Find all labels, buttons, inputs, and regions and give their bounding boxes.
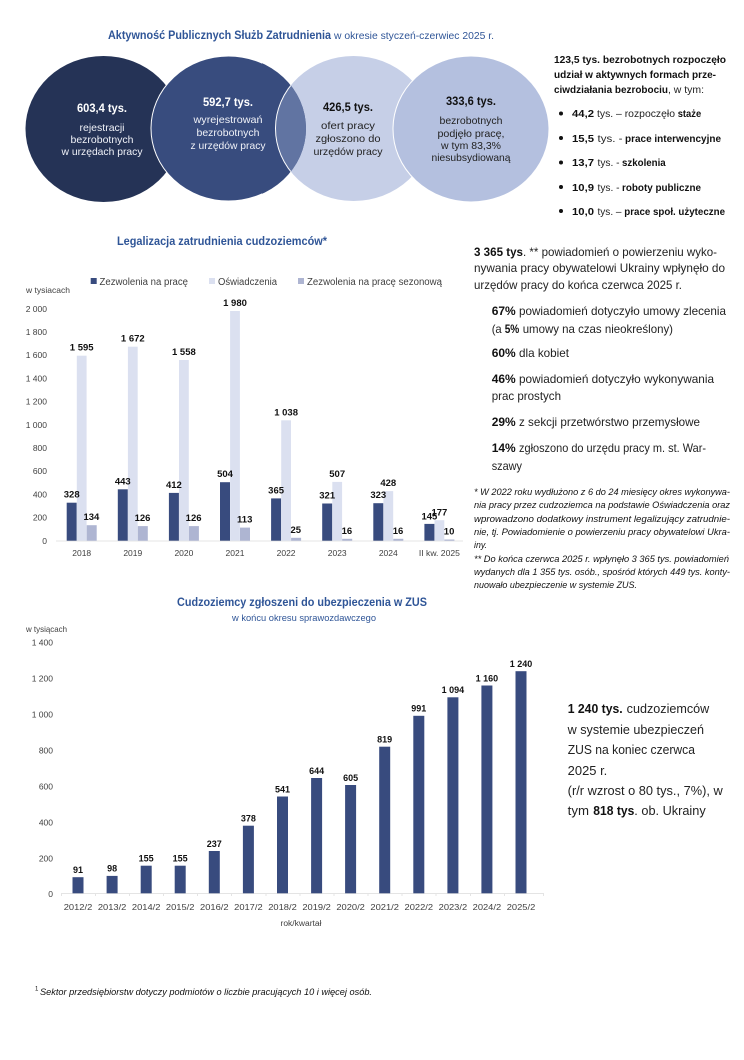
bars — [72, 671, 526, 893]
y axis labels — [32, 638, 53, 899]
text: job offers: urzędów pracy — [314, 146, 383, 158]
category labels: 2023/2 — [439, 902, 467, 912]
footnotes: legalization chart: * W 2022 roku wydłużono z 6 do 24 miesięcy okres wykonywa- — [474, 487, 730, 497]
text block: ZUS summary: (r/r wzrost o 80 tys., 7%), w — [568, 784, 724, 798]
heading: ZUS chart: Cudzoziemcy zgłoszeni do ubezpieczenia w ZUS — [177, 597, 427, 609]
footnotes: legalization chart: nia pracy przez cudzoziemca na podstawie Oświadczenia oraz — [474, 500, 731, 510]
footnotes: legalization chart: wydanych dla 1 355 tys. osób., spośród których 449 tys. konty- — [474, 567, 730, 577]
circle: deregistrations: z urzędów pracy — [190, 140, 266, 152]
value labels: 323 — [370, 490, 386, 501]
y axis labels: 1 400 — [26, 374, 47, 384]
category labels: 2018/2 — [268, 902, 297, 912]
category labels: 2019 — [123, 548, 143, 558]
value labels: 1 094 — [442, 685, 464, 695]
value labels: 237 — [207, 839, 222, 849]
legend: legalization chart: Oświadczenia — [218, 277, 277, 288]
footnote: enterprise sector: 1 — [35, 986, 39, 992]
category labels: 2021 — [226, 548, 245, 558]
value labels: 365 — [268, 485, 285, 496]
value labels: 541 — [275, 784, 290, 794]
circle: took up work: niesubsydiowaną — [432, 152, 511, 164]
y axis labels: 1 000 — [26, 420, 47, 430]
value labels — [73, 659, 532, 875]
value labels: 113 — [237, 515, 252, 526]
statistic: 46%: powiadomień dotyczyło wykonywania — [519, 372, 714, 386]
circle: deregistrations — [150, 56, 306, 200]
y axis labels: 400 — [39, 818, 53, 828]
statistic: 29%: 29% — [492, 415, 516, 429]
work permits bars — [67, 482, 434, 541]
text block: ZUS summary: 1 240 tys. — [568, 702, 623, 716]
x axis title: rok/kwartał — [280, 919, 322, 928]
value labels: 991 — [411, 704, 426, 714]
statistic: 60%: 60% — [492, 346, 516, 360]
heading: ZUS chart — [177, 597, 427, 624]
value labels: 321 — [319, 490, 336, 502]
footnotes: legalization chart: nie, tj. Powiadomienie o powierzeniu pracy obywatelowi Ukra- — [474, 527, 730, 537]
value labels: 644 — [309, 766, 324, 776]
value labels: 155 — [139, 854, 154, 864]
y axis labels: 1 000 — [32, 710, 53, 720]
legend: legalization chart: Zezwolenia na pracę sezonową — [307, 277, 442, 288]
circle: took up work: 333,6 tys. — [446, 96, 496, 108]
text block: ZUS summary: 818 tys — [593, 804, 634, 818]
value labels: 412 — [166, 480, 182, 491]
list: programme types: prace społ. użyteczne — [624, 206, 725, 218]
y axis labels: 400 — [33, 490, 47, 500]
statistic: 60% — [492, 346, 570, 360]
text block: Ukrainian citizens notifications — [474, 245, 726, 473]
footnotes: legalization chart: iny. — [474, 540, 487, 550]
category labels: 2022 — [277, 548, 296, 558]
value labels: 507 — [329, 469, 345, 480]
statistic: 46% — [492, 372, 714, 403]
text block: ZUS summary: cudzoziemców — [627, 702, 710, 716]
text: job offers: ofert pracy — [321, 120, 376, 132]
value labels: 177 — [431, 508, 447, 518]
statistic: 14%: 14% — [492, 441, 516, 455]
value labels: 1 558 — [172, 347, 196, 358]
footnotes: legalization chart: wprowadzono dodatkowy instrument legalizujący zatrudnie- — [474, 514, 730, 524]
category labels: 2015/2 — [166, 902, 195, 912]
statistic: 67%: 67% — [492, 304, 516, 318]
list: programme types: tys. - — [598, 157, 620, 169]
y axis labels: 1 400 — [32, 638, 53, 648]
bar chart: foreigners registered in ZUS — [25, 624, 544, 928]
value labels: 1 672 — [121, 334, 145, 345]
circle: registrations: rejestracji — [80, 122, 124, 134]
category labels: 2019/2 — [302, 902, 331, 912]
circle: took up work: bezrobotnych — [440, 115, 503, 127]
value labels: 126 — [135, 513, 150, 524]
circle: took up work: podjęło pracę, — [438, 128, 504, 140]
heading: legalization chart: Legalizacja zatrudnienia cudzoziemców* — [117, 236, 327, 248]
category labels: 2016/2 — [200, 902, 229, 912]
text block: ZUS summary: . ob. Ukrainy — [634, 804, 706, 818]
y axis labels: 800 — [39, 746, 53, 756]
text block: ZUS summary — [567, 702, 724, 818]
text block: active labour market programmes: udział w aktywnych formach prze- — [554, 69, 716, 81]
value labels — [64, 298, 454, 538]
category labels — [72, 548, 460, 558]
value labels: 328 — [64, 490, 80, 501]
category labels: 2018 — [72, 548, 91, 558]
statistic: 67%: umowy na czas nieokreślony) — [523, 322, 673, 336]
circle: job offers — [276, 56, 432, 201]
value labels: 10 — [444, 526, 454, 538]
y axis labels — [26, 304, 47, 546]
circle: took up work: w tym 83,3% — [440, 140, 501, 152]
category labels: 2013/2 — [98, 902, 127, 912]
y axis labels: 1 800 — [26, 327, 47, 337]
category labels: 2024 — [379, 548, 398, 558]
category labels: 2020/2 — [336, 902, 365, 912]
value labels: 605 — [343, 773, 358, 783]
y axis labels: 200 — [39, 854, 53, 864]
list: programme types: szkolenia — [622, 157, 666, 169]
value labels: 428 — [380, 478, 396, 489]
list: programme types: staże — [678, 108, 701, 120]
category labels: 2022/2 — [405, 902, 433, 912]
text block: Ukrainian citizens notifications: nywania pracy obywatelowi Ukrainy wpłynęło do — [474, 261, 725, 275]
value labels: 1 160 — [476, 673, 498, 683]
statistic: 67%: (a — [492, 322, 502, 336]
text block: active labour market programmes — [554, 54, 726, 218]
value labels: 1 240 — [510, 659, 532, 669]
title: public employment services activity — [108, 30, 494, 42]
value labels: 16 — [393, 526, 403, 537]
statistic: 67% — [492, 304, 726, 336]
list: programme types: roboty publiczne — [622, 182, 701, 194]
statistic: 67%: 5% — [505, 322, 520, 336]
y axis labels: 1 600 — [26, 350, 47, 360]
statistic: 60%: dla kobiet — [519, 346, 570, 360]
statistic: 46%: 46% — [492, 372, 516, 386]
category labels: 2017/2 — [234, 902, 263, 912]
value labels: 25 — [291, 525, 302, 536]
y axis labels: 800 — [33, 443, 47, 453]
title: public employment services activity: w okresie styczeń-czerwiec 2025 r. — [333, 30, 494, 42]
value labels: 378 — [241, 814, 256, 824]
list: programme types: 10,0 — [572, 206, 594, 218]
y axis labels: 0 — [48, 889, 53, 899]
category labels: 2012/2 — [64, 902, 93, 912]
axis title: w tysiacach — [25, 285, 70, 295]
statistic: 14%: zgłoszono do urzędu pracy m. st. War- — [519, 441, 706, 455]
heading: ZUS chart: w końcu okresu sprawozdawczego — [231, 613, 376, 624]
title: public employment services activity: Aktywność Publicznych Służb Zatrudnienia — [108, 30, 332, 42]
y axis labels: 600 — [39, 782, 53, 792]
y axis labels: 1 200 — [32, 674, 53, 684]
text block: ZUS summary: tym — [568, 804, 589, 818]
list: programme types: 13,7 — [572, 157, 594, 169]
statistic: 14% — [492, 441, 706, 473]
bar chart: legalization of foreigners' employment — [25, 285, 463, 558]
category labels: 2014/2 — [132, 902, 161, 912]
value labels: 91 — [73, 865, 83, 875]
seasonal permits bars — [87, 525, 454, 541]
list: programme types: 15,5 — [572, 133, 594, 145]
y axis labels: 0 — [42, 536, 47, 546]
category labels — [64, 902, 536, 912]
circle: registrations: bezrobotnych — [70, 134, 134, 146]
text block: Ukrainian citizens notifications: urzędów pracy do końca czerwca 2025 r. — [474, 278, 682, 292]
declarations bars — [77, 311, 444, 541]
circle: deregistrations: wyrejestrowań — [192, 114, 263, 126]
text block: ZUS summary: 2025 r. — [568, 764, 607, 778]
legend: legalization chart — [91, 277, 442, 288]
text: job offers: zgłoszono do — [316, 133, 381, 145]
list: programme types: tys. – rozpoczęło — [597, 108, 675, 120]
text: job offers — [314, 102, 383, 158]
value labels: 155 — [173, 854, 188, 864]
value labels: 145 — [421, 512, 438, 522]
statistic: 14%: szawy — [492, 459, 522, 473]
value labels: 1 595 — [70, 343, 94, 354]
circle: registrations: w urzędach pracy — [61, 146, 143, 158]
footnotes: legalization chart — [474, 487, 731, 590]
value labels: 16 — [342, 526, 352, 537]
y axis labels: 2 000 — [26, 304, 47, 314]
list: programme types: tys. - — [598, 182, 620, 194]
statistic: 67%: powiadomień dotyczyło umowy zlecenia — [519, 304, 726, 318]
value labels: 504 — [217, 469, 234, 480]
legend: legalization chart: Zezwolenia na pracę — [100, 277, 188, 288]
value labels: 819 — [377, 734, 392, 744]
y axis labels: 1 200 — [26, 396, 47, 406]
text block: ZUS summary: ZUS na koniec czerwca — [568, 743, 695, 757]
value labels: 98 — [107, 864, 117, 874]
category labels: 2020 — [174, 548, 194, 558]
category labels: 2021/2 — [370, 902, 399, 912]
list: programme types: prace interwencyjne — [625, 133, 721, 145]
value labels: 443 — [115, 476, 131, 487]
list: programme types: 10,9 — [572, 182, 594, 194]
y axis labels: 600 — [33, 466, 47, 476]
panel: overlapping circles — [26, 56, 549, 202]
list: programme types: 44,2 — [572, 108, 594, 120]
circle: registrations — [26, 56, 182, 202]
list: programme types: tys. - — [598, 133, 623, 145]
value labels: 1 038 — [274, 407, 298, 418]
footnotes: legalization chart: nuowało ubezpieczenie w systemie ZUS. — [474, 580, 637, 590]
category labels: 2023 — [328, 548, 347, 558]
footnote: enterprise sector: Sektor przedsiębiorstw dotyczy podmiotów o liczbie pracujących 10 i więcej osób. — [40, 987, 372, 997]
list: programme types — [559, 108, 725, 218]
value labels: 1 980 — [223, 298, 247, 309]
text block: active labour market programmes: , w tym: — [668, 84, 704, 96]
category labels: 2025/2 — [507, 902, 536, 912]
circle: registrations: 603,4 tys. — [77, 103, 127, 115]
circle: deregistrations: bezrobotnych — [196, 127, 260, 139]
value labels: 126 — [186, 513, 202, 524]
text block: Ukrainian citizens notifications: . ** powiadomień o powierzeniu wyko- — [523, 245, 717, 259]
text block: ZUS summary: w systemie ubezpieczeń — [567, 723, 704, 737]
list: programme types: tys. – — [598, 206, 622, 218]
footnotes: legalization chart: ** Do końca czerwca 2025 r. wpłynęło 3 365 tys. powiadomień — [474, 554, 729, 564]
category labels: II kw. 2025 — [419, 548, 460, 558]
y axis labels: 200 — [33, 512, 47, 522]
text block: active labour market programmes: ciwdziałania bezrobociu — [554, 84, 668, 96]
circle: deregistrations: 592,7 tys. — [203, 97, 253, 109]
statistic: 29%: z sekcji przetwórstwo przemysłowe — [519, 415, 700, 429]
text block: Ukrainian citizens notifications: 3 365 tys — [474, 245, 523, 259]
circle: took up work — [393, 56, 549, 202]
text: job offers: 426,5 tys. — [323, 102, 373, 114]
statistic: 46%: prac prostych — [492, 389, 561, 403]
value labels: 134 — [83, 512, 100, 523]
category labels: 2024/2 — [473, 902, 501, 912]
text block: active labour market programmes: 123,5 tys. bezrobotnych rozpoczęło — [554, 54, 726, 66]
axis title: w tysiącach — [25, 624, 67, 634]
